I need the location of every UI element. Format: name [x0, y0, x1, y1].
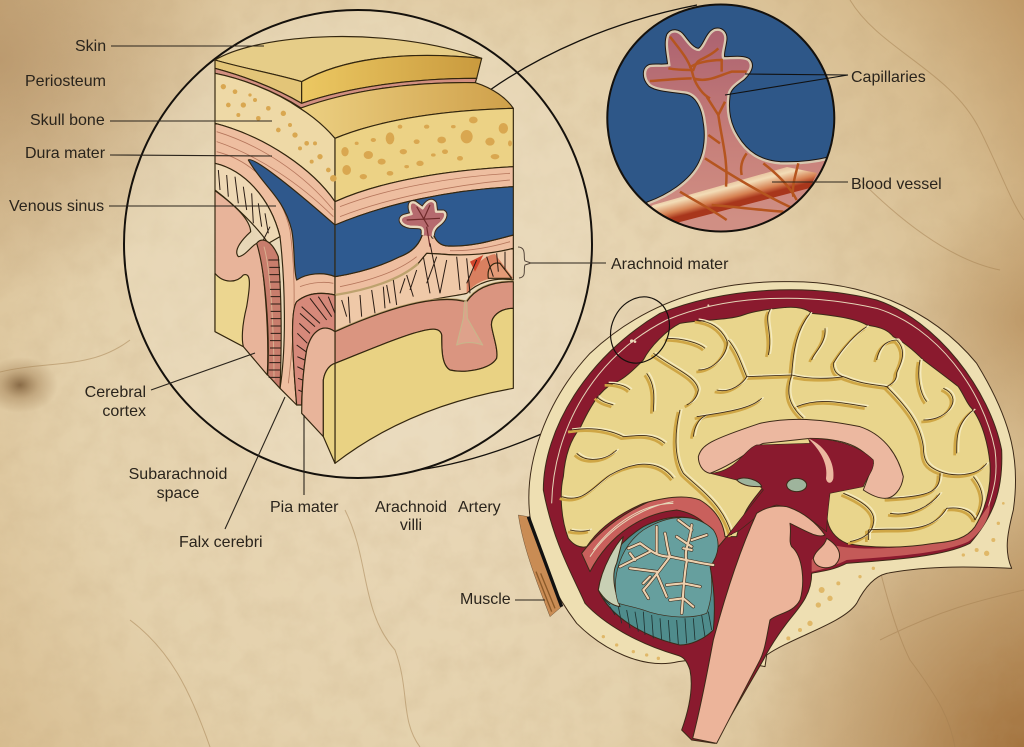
label: Arachnoid villi: Arachnoid	[375, 499, 447, 516]
corpus callosum	[698, 419, 903, 498]
skin layer	[215, 37, 482, 103]
label: Blood vessel: Blood vessel	[851, 176, 942, 193]
label: Venous sinus: Venous sinus	[9, 198, 104, 215]
villus tissue outline	[642, 28, 826, 203]
bone speckles	[602, 502, 1005, 660]
small arachnoid granulations	[630, 304, 709, 343]
label: Capillaries	[725, 69, 926, 95]
label: Pia mater: Pia mater	[270, 499, 339, 516]
fornix	[808, 438, 834, 483]
label: Falx cerebri: Falx cerebri	[179, 534, 263, 551]
label: Cerebral cortex: Cerebral	[85, 384, 146, 401]
pituitary	[813, 538, 840, 568]
label: Cerebral cortex	[85, 353, 255, 420]
midbrain green nuclei	[737, 478, 807, 492]
label: Skin: Skin	[75, 38, 106, 55]
arachnoid space with strands	[335, 243, 513, 332]
capillaries	[650, 37, 798, 220]
panel: inset circle showing arachnoid villus	[607, 4, 840, 233]
venous sinus	[248, 160, 513, 280]
arachnoid brace	[518, 247, 531, 278]
white matter front face	[335, 308, 513, 463]
label: Pia mater	[270, 415, 339, 516]
label: Artery: Artery	[458, 499, 501, 516]
label: Skull bone: Skull bone	[30, 112, 105, 129]
connector line from block to inset circle	[490, 5, 697, 90]
skull bone layer	[215, 73, 513, 202]
label: Arachnoid villi: villi	[400, 517, 422, 534]
muscle	[518, 515, 562, 617]
left face: arachnoid strands	[215, 163, 280, 243]
label: Cerebral cortex: cortex	[102, 403, 146, 420]
panel: sagittal brain section	[518, 282, 1016, 743]
head outline	[529, 282, 1016, 667]
left face: white matter	[215, 273, 249, 347]
sulci: gold shadow	[560, 312, 985, 544]
panel: layered tissue block	[215, 37, 513, 463]
label: Periosteum: Periosteum	[25, 73, 106, 90]
blue venous sinus background	[607, 4, 834, 232]
cerebellum	[598, 517, 718, 645]
label: Subarachnoid space: Subarachnoid	[129, 466, 227, 483]
sulci: dark lines	[562, 310, 987, 542]
left face: cortex	[215, 191, 268, 375]
label: Arachnoid villi	[375, 499, 447, 534]
brainstem	[693, 506, 825, 743]
label: Muscle	[460, 591, 545, 608]
label: Arachnoid mater: Arachnoid mater	[611, 256, 729, 273]
magnifier circle: cross-section block	[124, 10, 592, 478]
label: Muscle: Muscle	[460, 591, 511, 608]
villus tissue	[640, 30, 840, 233]
connector line from block to brain	[418, 421, 570, 470]
cerebrum	[561, 307, 990, 547]
membrane lines	[552, 298, 996, 507]
tentorium	[582, 493, 727, 572]
label: Falx cerebri	[179, 397, 285, 551]
arachnoid villus	[401, 201, 445, 247]
cerebral cortex front face	[335, 282, 513, 371]
label: Subarachnoid space: space	[157, 485, 199, 502]
periosteum layer	[215, 68, 477, 108]
dura mater layer and falx	[215, 123, 513, 405]
left face: ladder strands	[257, 240, 281, 388]
dark red skull membranes	[543, 290, 1002, 743]
lower pink membrane	[812, 503, 990, 572]
blood vessel	[651, 167, 817, 222]
label: Subarachnoid space	[129, 466, 227, 502]
ventricle	[710, 438, 874, 537]
sulci: pale highlight	[564, 309, 989, 541]
locator ring on skull	[600, 287, 680, 373]
right of falx: strand zone	[293, 293, 335, 405]
label: Capillaries: Capillaries	[851, 69, 926, 86]
label: Dura mater: Dura mater	[25, 145, 106, 162]
right of falx: cortex and white matter	[302, 328, 335, 463]
